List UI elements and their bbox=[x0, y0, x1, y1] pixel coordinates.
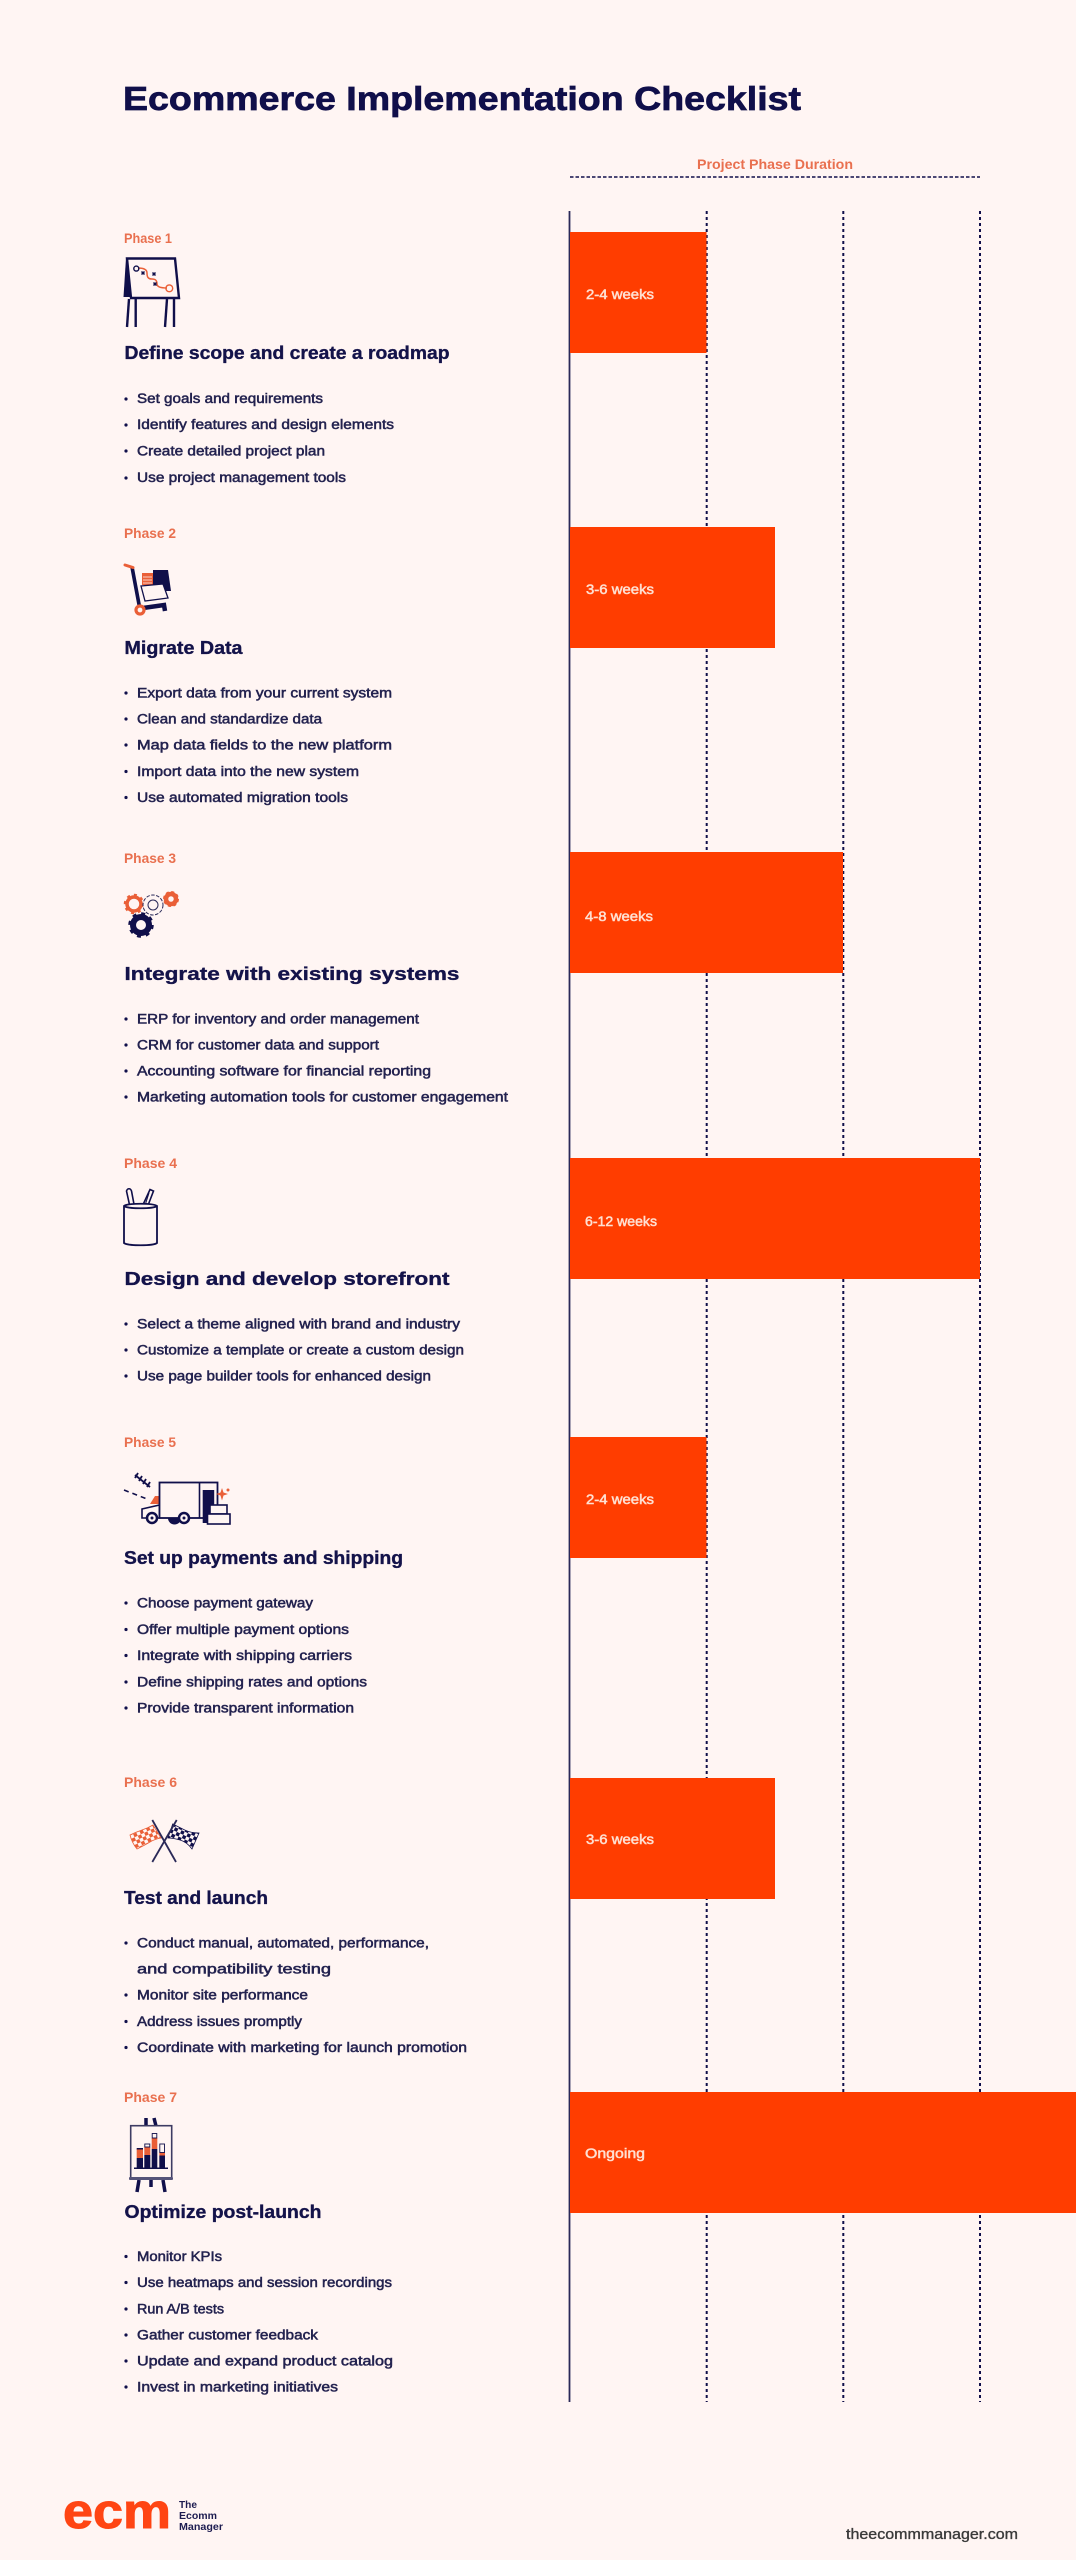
phase 4 heading: Design and develop storefront bbox=[124, 1268, 450, 1289]
phase 7 checklist: Update and expand product catalog bbox=[137, 2354, 393, 2368]
footer logo: ecm The Ecomm Manager: Ecomm bbox=[179, 2510, 217, 2522]
phase 3 heading: Integrate with existing systems bbox=[124, 963, 460, 984]
phase 7 checklist: Use heatmaps and session recordings bbox=[137, 2275, 392, 2290]
phase 2 label: Phase 2 bbox=[124, 525, 176, 541]
bar: phase 3 duration bbox=[570, 852, 843, 973]
panel: phase 4 bbox=[124, 1155, 464, 1384]
phase 2 checklist: Map data fields to the new platform bbox=[137, 738, 392, 752]
phase 7 checklist bbox=[124, 2249, 393, 2394]
footer logo: ecm The Ecomm Manager bbox=[63, 2485, 223, 2539]
chart header: Project Phase Duration bbox=[697, 156, 853, 172]
panel: phase 5 bbox=[124, 1434, 403, 1716]
phase 6 checklist: Address issues promptly bbox=[137, 2014, 302, 2029]
footer logo: ecm The Ecomm Manager: Manager bbox=[179, 2521, 223, 2533]
phase 1 heading: Define scope and create a roadmap bbox=[124, 342, 450, 363]
bar: phase 5 duration: 2-4 weeks bbox=[586, 1492, 654, 1507]
bar: phase 7 duration: Ongoing bbox=[585, 2146, 645, 2161]
panel: phase 6 bbox=[124, 1774, 467, 2055]
phase 7 checklist: Invest in marketing initiatives bbox=[137, 2380, 338, 2394]
phase 6 label: Phase 6 bbox=[124, 1774, 177, 1790]
phase 4 checklist: Select a theme aligned with brand and industry bbox=[137, 1316, 460, 1332]
bar: phase 6 duration: 3-6 weeks bbox=[586, 1832, 654, 1847]
phase 2 checklist: Import data into the new system bbox=[137, 764, 359, 779]
phase 3 checklist: ERP for inventory and order management bbox=[137, 1012, 419, 1026]
phase 1 checklist bbox=[124, 391, 394, 485]
bar: phase 7 duration bbox=[570, 2092, 1076, 2213]
phase 1 checklist: Use project management tools bbox=[137, 470, 346, 485]
footer logo: ecm The Ecomm Manager: The bbox=[179, 2499, 197, 2511]
phase 3 checklist bbox=[124, 1012, 508, 1104]
phase 1 checklist: Create detailed project plan bbox=[137, 444, 325, 458]
phase 6 checklist: Conduct manual, automated, performance, bbox=[137, 1936, 429, 1950]
icon: gears bbox=[125, 892, 178, 936]
phase 7 heading: Optimize post-launch bbox=[124, 2201, 322, 2222]
phase 6 checklist: Coordinate with marketing for launch promotion bbox=[137, 2040, 467, 2055]
phase 2 checklist: Use automated migration tools bbox=[137, 790, 348, 805]
phase 4 label: Phase 4 bbox=[124, 1155, 177, 1171]
panel: phase 2 bbox=[124, 525, 392, 805]
phase 7 checklist: Gather customer feedback bbox=[137, 2328, 318, 2342]
phase 5 checklist: Offer multiple payment options bbox=[137, 1622, 349, 1637]
icon: checkered flags bbox=[130, 1820, 199, 1862]
phase 2 checklist: Export data from your current system bbox=[137, 686, 392, 700]
phase 4 checklist bbox=[124, 1316, 464, 1384]
panel: phase 1 bbox=[124, 230, 450, 485]
bar: phase 4 duration: 6-12 weeks bbox=[585, 1214, 657, 1229]
panel: phase 3 bbox=[124, 850, 508, 1104]
phase 4 checklist: Customize a template or create a custom design bbox=[137, 1342, 464, 1358]
bar: phase 5 duration bbox=[570, 1437, 706, 1558]
icon: delivery truck bbox=[124, 1473, 230, 1524]
icon: data cart bbox=[125, 565, 171, 614]
bar: phase 4 duration bbox=[570, 1158, 980, 1279]
bar: phase 2 duration bbox=[570, 527, 775, 648]
bar: phase 6 duration bbox=[570, 1778, 775, 1899]
bar: phase 2 duration: 3-6 weeks bbox=[586, 582, 654, 597]
phase 7 checklist: Run A/B tests bbox=[137, 2302, 224, 2316]
phase 5 checklist: Choose payment gateway bbox=[137, 1596, 313, 1610]
bar: phase 1 duration bbox=[570, 232, 706, 353]
phase 2 checklist: Clean and standardize data bbox=[137, 712, 323, 726]
phase 1 checklist: Set goals and requirements bbox=[137, 391, 323, 406]
bar: phase 1 duration: 2-4 weeks bbox=[586, 287, 654, 302]
title: Ecommerce Implementation Checklist bbox=[123, 80, 801, 117]
phase 7 label: Phase 7 bbox=[124, 2089, 177, 2105]
phase 6 checklist: Monitor site performance bbox=[137, 1988, 308, 2002]
phase 6 heading: Test and launch bbox=[124, 1887, 268, 1908]
phase 3 checklist: CRM for customer data and support bbox=[137, 1038, 379, 1052]
phase 7 checklist: Monitor KPIs bbox=[137, 2249, 222, 2264]
phase 1 label: Phase 1 bbox=[124, 230, 172, 246]
phase 3 checklist: Marketing automation tools for customer engagement bbox=[137, 1090, 508, 1104]
phase 5 checklist: Define shipping rates and options bbox=[137, 1674, 367, 1690]
phase 5 checklist bbox=[124, 1596, 367, 1716]
phase 2 checklist bbox=[124, 686, 392, 805]
chart: project phase duration bbox=[570, 156, 1076, 2402]
panel: phase 7 bbox=[124, 2089, 393, 2394]
phase 5 checklist: Integrate with shipping carriers bbox=[137, 1648, 352, 1663]
phase 5 checklist: Provide transparent information bbox=[137, 1700, 354, 1716]
phase 3 label: Phase 3 bbox=[124, 850, 176, 866]
phase 6 checklist: and compatibility testing bbox=[137, 1962, 331, 1976]
phase 4 checklist: Use page builder tools for enhanced design bbox=[137, 1368, 431, 1384]
footer website: theecommmanager.com bbox=[846, 2527, 1018, 2543]
phase 5 heading: Set up payments and shipping bbox=[124, 1547, 403, 1568]
footer logo: ecm The Ecomm Manager: ecm bbox=[63, 2485, 171, 2539]
phase 3 checklist: Accounting software for financial reporting bbox=[137, 1064, 431, 1078]
phase 1 checklist: Identify features and design elements bbox=[137, 417, 394, 432]
phase 2 heading: Migrate Data bbox=[124, 637, 243, 658]
phase 5 label: Phase 5 bbox=[124, 1434, 176, 1450]
bar: phase 3 duration: 4-8 weeks bbox=[585, 909, 653, 924]
icon: pen cup bbox=[124, 1189, 157, 1245]
phase 6 checklist bbox=[124, 1936, 467, 2055]
icon: roadmap flip chart bbox=[124, 258, 179, 327]
icon: bar chart easel bbox=[129, 2118, 173, 2192]
